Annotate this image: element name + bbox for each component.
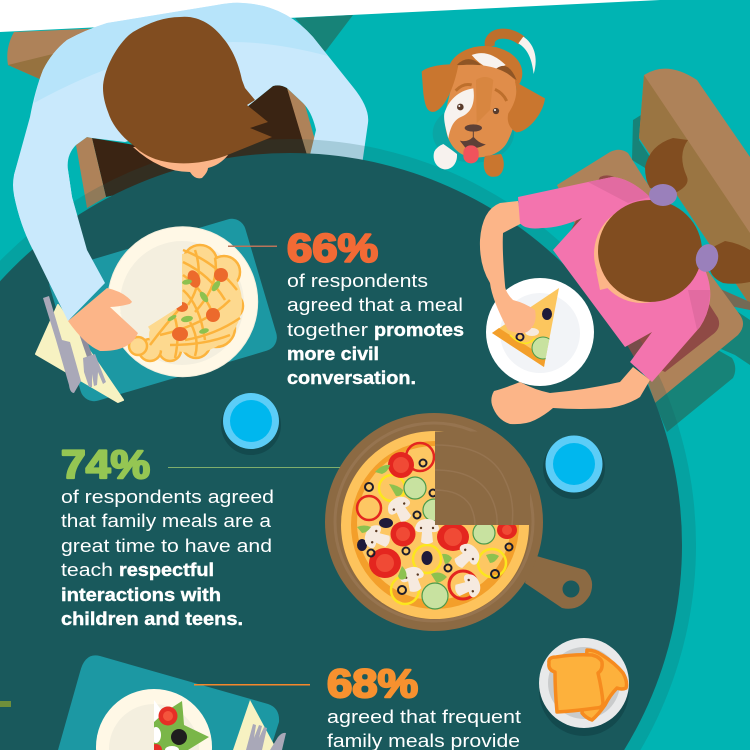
hair ties — [649, 184, 677, 206]
stat 68%: agreed that frequent — [327, 706, 522, 727]
stat 66%: 66% — [287, 226, 378, 270]
man's neck — [133, 147, 228, 178]
pizza slice — [492, 288, 559, 367]
girl's face — [594, 205, 690, 303]
placemat 1 — [46, 215, 280, 405]
man's chair — [7, 15, 353, 208]
man's shirt back — [13, 3, 368, 250]
stat 74% — [61, 443, 274, 629]
stat 66% — [287, 226, 464, 388]
table rim — [0, 139, 696, 750]
stat 66%: conversation. — [287, 367, 416, 388]
man's hand — [68, 288, 138, 351]
table top — [0, 153, 682, 750]
white top band — [0, 0, 660, 32]
toast plate — [539, 638, 629, 736]
stat 74%: children and teens. — [61, 608, 243, 629]
stat 74%: great time to have and — [61, 535, 272, 556]
stat 74%: teach — [61, 559, 113, 580]
girl's hair — [598, 200, 702, 302]
stat 68%: 68% — [327, 662, 418, 706]
knife — [43, 296, 81, 393]
stat line 74 — [168, 467, 340, 468]
stat 74%: 74% — [61, 443, 150, 487]
pizza — [341, 431, 529, 619]
girl's shirt — [518, 177, 710, 382]
pasta plate — [108, 227, 258, 377]
fork — [75, 320, 106, 387]
stat line 68 — [194, 684, 310, 686]
girl — [480, 138, 750, 424]
stat 74%: interactions with — [61, 584, 221, 605]
girl's lower arm and hand — [491, 367, 650, 424]
stat 66%: promotes — [374, 319, 464, 340]
pizza board — [325, 413, 592, 631]
stat 74%: respectful — [119, 559, 214, 580]
placemat 2 — [58, 655, 279, 750]
stat 66%: of respondents — [287, 270, 428, 291]
stat 66%: together — [287, 319, 368, 340]
cup right — [543, 436, 605, 499]
cup left — [221, 393, 281, 455]
green marker — [0, 701, 11, 707]
girl's plate — [486, 278, 594, 386]
man's sleeve — [14, 120, 105, 321]
food wedge held by man — [120, 246, 182, 333]
fork and knife 2 — [246, 724, 286, 750]
napkin 2 — [233, 700, 277, 750]
man's hair — [103, 17, 272, 163]
napkin 1 — [36, 305, 123, 402]
stat 66%: agreed that a meal — [287, 294, 463, 315]
salad plate — [96, 689, 212, 750]
girl's chair — [557, 69, 750, 432]
girl's upper arm and hand — [480, 201, 536, 333]
stat 74%: that family meals are a — [61, 510, 272, 531]
stat 66%: more civil — [287, 343, 379, 364]
ponytails — [645, 138, 688, 192]
stat line 66 — [228, 246, 277, 247]
stat 74%: of respondents agreed — [61, 486, 274, 507]
pizza board missing quarter — [435, 432, 530, 525]
stat 68% — [327, 662, 522, 750]
dog — [422, 34, 545, 177]
